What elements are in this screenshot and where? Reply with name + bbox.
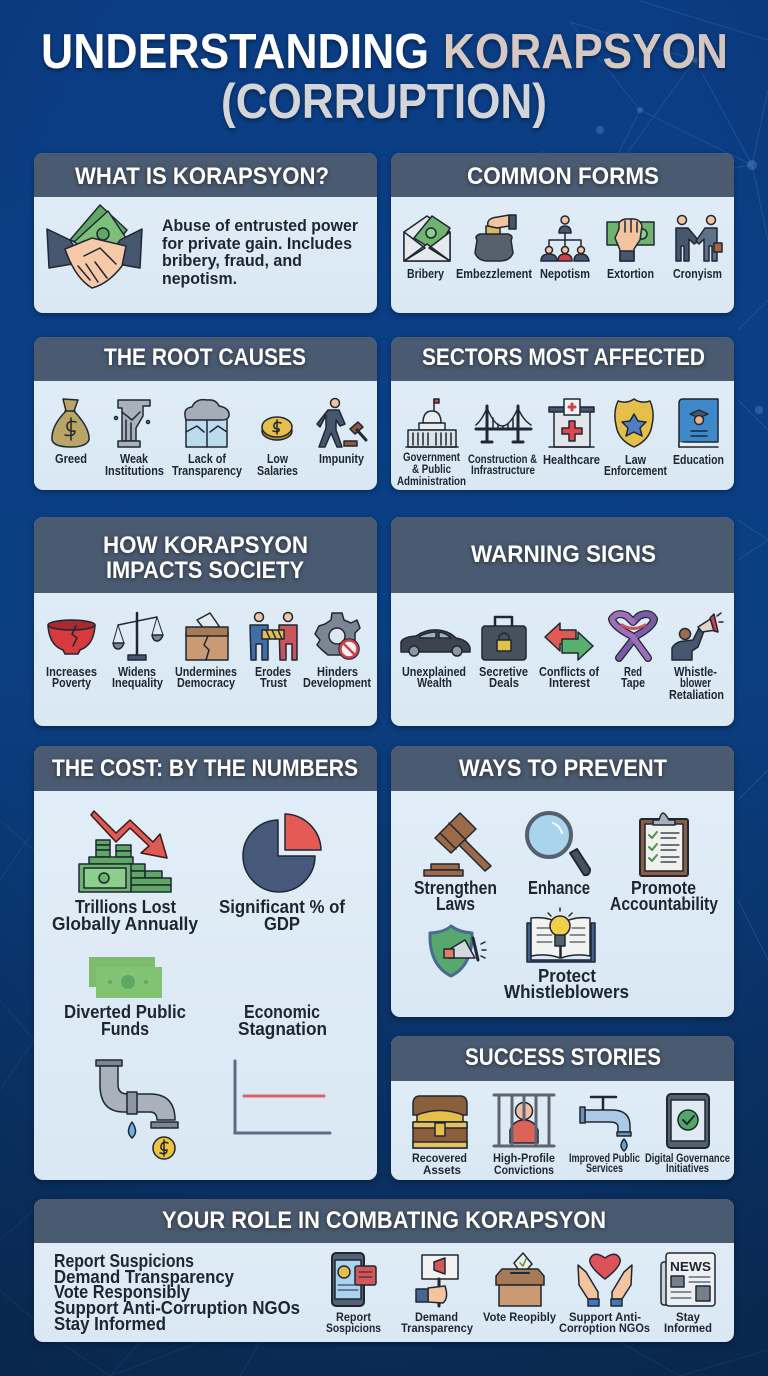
item: increases poverty [46,620,97,690]
label: Assets [423,1163,461,1177]
label: Wealth [417,675,452,690]
label: Enforcement [604,463,668,478]
label [414,878,497,914]
item: diverted public funds [64,957,186,1159]
label [493,1151,555,1177]
panel: common forms [391,153,734,313]
panel: what is korapsyon [34,153,377,313]
label [46,664,97,690]
label [64,1002,186,1039]
label: Unexplained [402,664,466,679]
item: high-profile convictions [493,1095,555,1177]
label: Poverty [52,675,92,690]
panel: the root causes [34,337,377,490]
icon: coin [262,417,292,440]
icon: broken red bowl [48,620,95,654]
label: Greed [55,451,87,466]
icon: gear with stop sign [315,613,360,659]
heading: WHAT IS KORAPSYON? [75,163,329,190]
label: Increases [46,664,97,679]
label: Development [303,675,372,690]
label: Enhance [528,878,590,898]
icon: scales [113,613,163,660]
label: Promote [631,878,696,898]
label: Democracy [177,675,236,690]
heading: YOUR ROLE IN COMBATING KORAPSYON [162,1207,606,1234]
item: demand transparency [401,1255,473,1335]
item: conflicts of interest [539,623,600,690]
heading: WARNING SIGNS [471,541,656,568]
label: Interest [549,675,591,690]
title: (CORRUPTION) [221,75,547,129]
label: Widens [118,664,156,679]
label: Infrastructure [471,463,535,477]
item: undermines democracy [175,613,237,690]
action list: Report Suspicions [54,1251,194,1271]
label [645,1151,730,1175]
label [172,451,243,478]
label: Protect [538,966,596,986]
panel: ways to prevent [391,746,734,1017]
item: protect whistleblowers [430,908,629,1002]
label: Secretive [479,664,528,679]
icon: two men shaking hands [676,216,722,261]
label [604,452,668,478]
label [610,878,718,914]
icon: window with cloud [185,400,229,447]
label [112,664,164,690]
label: Informed [664,1321,712,1335]
item: promote accountability [610,813,718,914]
description text: Abuse of entrusted power [162,216,358,235]
item: strengthen laws [414,813,497,914]
item: education [673,399,724,467]
icon: green bills [89,957,162,998]
icon: hospital [549,399,594,447]
label [238,1002,327,1039]
label [257,451,298,478]
title [41,25,728,129]
label: Diverted Public [64,1002,186,1022]
label: Lack of [188,451,227,466]
label: Nepotism [540,266,590,281]
label: Improved Public [569,1151,640,1165]
icon: hands holding heart [578,1254,632,1306]
description text: nepotism. [162,269,237,288]
icon: envelope with cash [404,216,450,261]
label: Sospicions [326,1321,381,1335]
icon: tablet with check [667,1094,709,1148]
label: Retaliation [669,687,724,702]
label [401,1310,473,1335]
heading: COMMON FORMS [467,163,659,190]
label: Undermines [175,664,237,679]
item: economic stagnation [235,1002,330,1133]
item: enhance [527,813,590,898]
icon: money bag [52,399,89,447]
label: Services [586,1161,623,1175]
label: Cronyism [673,266,722,281]
item: law enforcement [604,399,668,478]
item: embezzlement [456,215,533,281]
label [664,1310,712,1335]
icon: gavel [424,813,491,876]
label: Laws [436,894,475,914]
action list [54,1251,300,1334]
item: digital governance initiatives [645,1094,730,1175]
item: stay informed [661,1253,715,1335]
heading [103,532,308,584]
label: Corroption NGOs [559,1321,650,1335]
icon: phone with chat bubble [332,1253,376,1306]
panel: your role in combating korapsyon [34,1199,734,1342]
icon: blue book [679,399,718,447]
icon: leaking pipe with coin [96,1060,178,1159]
label: Administration [397,474,466,488]
icon: hand dropping coin into pot [475,215,516,261]
label: Recovered [412,1151,467,1165]
label: GDP [264,914,300,934]
item: lack of transparency [172,400,243,478]
icon: ballot box [496,1253,544,1306]
icon: suspension bridge [476,406,531,442]
label: Whistleblowers [504,982,629,1002]
icon: hand holding protest sign [416,1255,458,1306]
action list: Demand Transparency [54,1267,234,1287]
icon: broken ballot box [186,613,228,660]
item: healthcare [543,399,600,467]
icon: fist gripping cash [607,219,654,261]
label: Strengthen [414,878,497,898]
label [52,897,198,934]
icon: water tap [580,1097,631,1151]
label: Initiatives [666,1161,709,1175]
item: hinders development [303,613,372,690]
label: Bribery [407,266,445,281]
item: unexplained wealth [401,630,470,690]
label: Support Anti- [569,1310,641,1324]
label [402,664,466,690]
label: Red [624,664,642,679]
label: Inequality [112,675,164,690]
label [504,966,629,1002]
icon: org chart [541,216,589,261]
label [621,664,645,690]
label: Erodes [255,664,291,679]
label: & Public [412,462,451,476]
heading: THE ROOT CAUSES [104,344,306,371]
item: extortion [607,219,654,281]
icon: falling arrow over cash stacks [79,811,171,892]
item: impunity [317,398,366,466]
label: Trust [260,675,288,690]
action list: Stay Informed [54,1314,166,1334]
label: Government [403,450,460,464]
icon: pie chart [243,814,321,892]
label: Education [673,452,724,467]
label: Salaries [257,463,298,478]
label: Impunity [319,451,365,466]
label: Embezzlement [456,266,533,281]
item: support ngos [559,1254,650,1335]
icon: tangled ribbon [612,614,654,658]
label: Tape [621,675,645,690]
item: improved public services [569,1097,640,1175]
item: whistle-blower retaliation [669,613,724,702]
label [397,450,466,488]
description text: for private gain. Includes [162,234,352,253]
item: red tape [612,614,654,690]
label: Law [625,452,647,467]
item: low salaries [257,417,298,478]
label: Trillions Lost [75,897,176,917]
label: Construction & [468,452,537,466]
label: Accountability [610,894,718,914]
item: erodes trust [250,612,297,690]
icon: shield with megaphone [430,926,486,976]
label: Funds [101,1019,149,1039]
icon: treasure chest [413,1096,467,1148]
label: Healthcare [543,452,600,467]
label [326,1310,381,1335]
icon: police badge [615,399,653,447]
label: Institutions [105,463,164,478]
label [669,664,724,702]
panel: sectors most affected [391,337,734,490]
icon: opposing arrows [545,623,593,660]
label: Convictions [494,1163,554,1177]
label: Stagnation [238,1019,327,1039]
item: report suspicions [326,1253,381,1335]
label: blower [680,675,711,690]
label [303,664,372,690]
panel: success stories [391,1036,734,1180]
icon: open book with light bulb [527,908,595,962]
label [559,1310,650,1335]
label [255,664,291,690]
icon: person walking past gavel [317,398,366,447]
label: Globally Annually [52,914,198,934]
icon: cracked column [114,400,150,447]
label: Extortion [607,266,654,281]
label: Significant % of [219,897,346,917]
label: Weak [120,451,149,466]
icon: handshake with money [47,205,142,288]
icon: briefcase with padlock [482,617,526,660]
item: significant pct of gdp [219,814,346,934]
label: Demand [415,1310,458,1324]
action list: Vote Responsibly [54,1282,190,1302]
icon: two people with barrier [250,612,297,660]
item: nepotism [540,216,590,281]
icon: newspaper: NEWS [670,1259,711,1274]
label [219,897,346,934]
label: Economic [244,1002,320,1022]
panel: the cost by the numbers [34,746,377,1180]
icon: person behind bars [494,1095,554,1146]
label: Digital Governance [645,1151,730,1165]
label: Low [267,451,289,466]
title: KORAPSYON [443,25,728,79]
action list: Support Anti-Corruption NGOs [54,1298,300,1318]
icon: capitol building [406,399,458,447]
item: trillions lost [52,811,198,934]
label: High-Profile [493,1151,555,1165]
heading: SUCCESS STORIES [465,1044,661,1071]
label: Transparency [401,1321,473,1335]
label [468,452,537,477]
item: recovered assets [412,1096,467,1177]
label [569,1151,640,1175]
label: Transparency [172,463,243,478]
description text: bribery, fraud, and [162,251,302,270]
heading: IMPACTS SOCIETY [106,557,304,584]
label: Deals [489,675,519,690]
label [539,664,600,690]
icon: magnifying glass [527,813,590,875]
item: bribery [404,216,450,281]
title: UNDERSTANDING [41,25,429,79]
label [105,451,164,478]
item: government [397,399,466,488]
item: greed [52,399,89,466]
panel: warning signs [391,517,734,726]
item: widens inequality [112,613,164,690]
heading: SECTORS MOST AFFECTED [422,344,705,371]
label [412,1151,467,1177]
heading: WAYS TO PREVENT [459,755,667,782]
label: Hinders [317,664,358,679]
item: weak institutions [105,400,164,478]
panel: how korapsyon impacts society [34,517,377,726]
item: vote responsibly [483,1253,556,1324]
icon: person with megaphone [672,613,723,660]
heading: HOW KORAPSYON [103,532,308,559]
label [175,664,237,690]
label: Vote Reopibly [483,1310,556,1324]
heading: THE COST: BY THE NUMBERS [52,755,358,782]
label: Report [336,1310,371,1324]
label: Whistle- [674,664,717,679]
label [479,664,528,690]
icon: checklist clipboard [640,813,688,876]
item: construction [468,406,537,477]
label: Stay [676,1310,700,1324]
description text [162,216,358,288]
item: cronyism [673,216,722,281]
icon: flat line chart [235,1061,330,1133]
item: secretive deals [479,617,528,690]
label: Conflicts of [539,664,600,679]
icon: black car [401,630,470,656]
